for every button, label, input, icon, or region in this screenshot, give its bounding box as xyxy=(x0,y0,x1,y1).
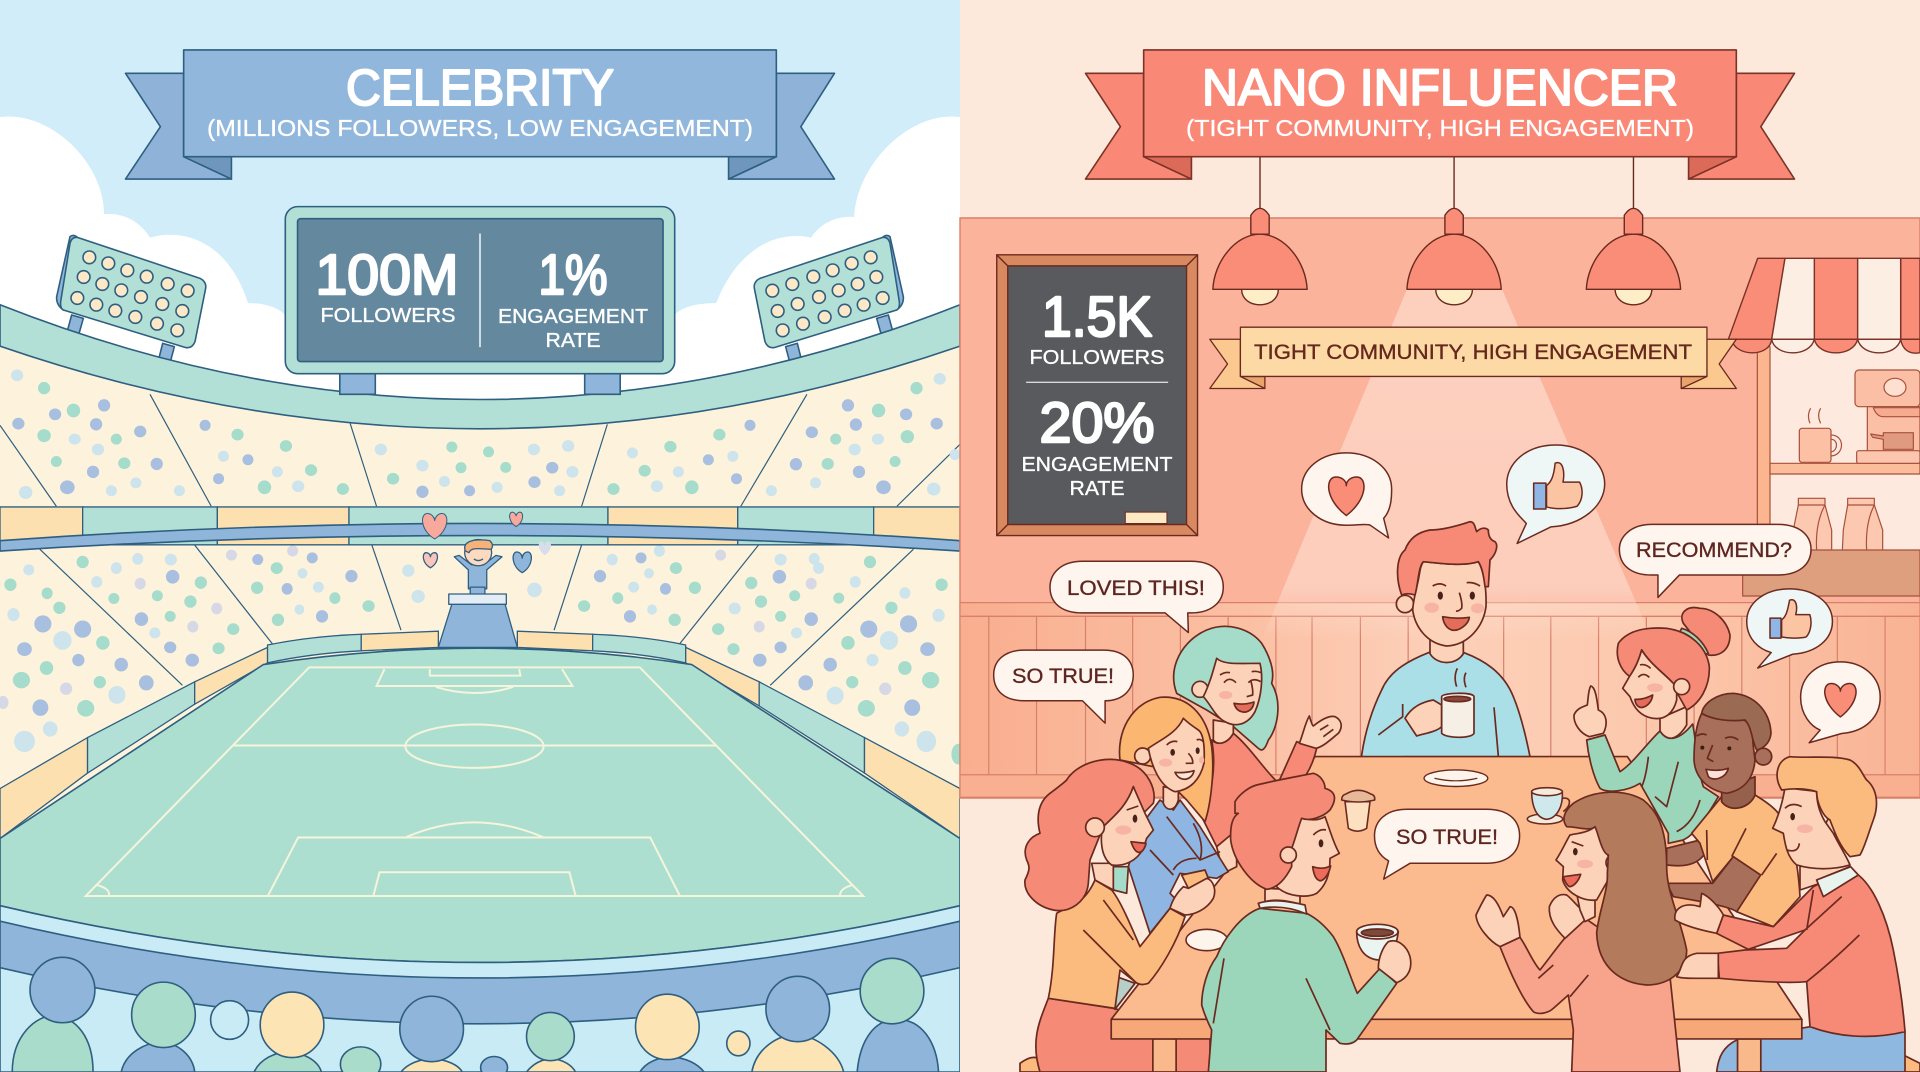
lamp light beam xyxy=(1262,289,1652,640)
football pitch xyxy=(0,648,960,962)
chalkboard stats xyxy=(997,255,1198,536)
stool and skirt behind the table xyxy=(1020,998,1210,1072)
cafe counter with awning and shelves xyxy=(1728,258,1920,596)
bubble: thumbs up xyxy=(1507,445,1605,543)
bubble: loved this xyxy=(1050,561,1223,633)
title banner: nano influencer: NANO INFLUENCER xyxy=(1202,59,1678,116)
celebrity on podium xyxy=(423,540,551,647)
scoreboard frame xyxy=(285,207,675,394)
bubble: recommend xyxy=(1619,524,1811,597)
pitch perimeter wall xyxy=(0,631,960,839)
foreground seating and crowd xyxy=(0,906,960,1072)
stadium roof band xyxy=(0,305,960,429)
coffee cup and saucer xyxy=(1527,788,1569,824)
title banner: celebrity: CELEBRITY xyxy=(346,59,614,116)
sub banner: tight community xyxy=(1210,327,1736,388)
scoreboard stats text: ENGAGEMENT xyxy=(498,306,648,328)
scoreboard stats text: 1% xyxy=(538,243,608,307)
cafe table xyxy=(1111,757,1802,1072)
cafe wall xyxy=(960,218,1920,798)
bubble: loved this: LOVED THIS! xyxy=(1067,577,1205,600)
bubble: small thumbs up xyxy=(1747,589,1832,668)
person: host with coffee xyxy=(1362,522,1530,768)
lower stands seating xyxy=(0,532,965,842)
bubble: small heart xyxy=(1801,662,1880,743)
chalkboard stats: 1.5K xyxy=(1042,285,1152,349)
upper wall background xyxy=(960,0,1920,1072)
bubble: recommend: RECOMMEND? xyxy=(1636,539,1792,562)
floodlight right xyxy=(754,235,903,363)
person: blond man in red sweater xyxy=(1675,757,1905,1036)
person: blond woman with phone xyxy=(1119,697,1237,933)
title banner: nano influencer: (TIGHT COMMUNITY, HIGH ENGAGEMENT) xyxy=(1186,115,1694,141)
bubble: so true left xyxy=(994,650,1133,723)
sub banner: tight community: TIGHT COMMUNITY, HIGH ENGAGEMENT xyxy=(1254,341,1692,364)
clouds xyxy=(0,116,960,448)
bubble: heart xyxy=(1302,453,1392,538)
person: man in yellow shirt xyxy=(1667,693,1800,927)
upper stands seating xyxy=(0,346,961,544)
person: man in mint sweater xyxy=(1202,773,1411,1072)
bubble: so true left: SO TRUE! xyxy=(1012,665,1114,688)
title banner: celebrity: (MILLIONS FOLLOWERS, LOW ENGAGEMENT) xyxy=(207,115,753,141)
wood wainscoting xyxy=(960,603,1920,797)
chalkboard stats: 20% xyxy=(1040,391,1154,455)
scoreboard stats text: 100M xyxy=(316,243,458,307)
scoreboard stats text xyxy=(316,243,648,352)
floodlight left xyxy=(57,235,206,363)
panel: celebrity stadium xyxy=(0,0,965,1072)
title banner: nano influencer xyxy=(1086,50,1794,179)
scoreboard stats text: RATE xyxy=(546,330,600,352)
scoreboard stats text: FOLLOWERS xyxy=(320,305,456,327)
table cups and plate xyxy=(1186,790,1375,951)
chalkboard stats: RATE xyxy=(1070,478,1124,500)
person: woman with long brown hair xyxy=(1476,792,1687,1072)
title banner: celebrity xyxy=(126,50,834,179)
person: curly haired woman xyxy=(1025,759,1215,1009)
panel: nano influencer cafe xyxy=(960,0,1920,1072)
person: woman with mint hair xyxy=(1174,626,1341,847)
hanging lamps xyxy=(1213,157,1681,305)
blond man's trousers xyxy=(1717,1027,1920,1072)
bubble: so true middle xyxy=(1374,809,1520,879)
hearts above the celebrity xyxy=(423,512,523,539)
bubble: so true middle: SO TRUE! xyxy=(1396,826,1498,849)
chalkboard stats: ENGAGEMENT xyxy=(1022,454,1172,476)
mid tier wall and rail xyxy=(0,507,960,551)
person: woman with bun xyxy=(1574,608,1730,843)
sky background xyxy=(0,0,960,1072)
chalkboard stats: FOLLOWERS xyxy=(1030,347,1164,369)
